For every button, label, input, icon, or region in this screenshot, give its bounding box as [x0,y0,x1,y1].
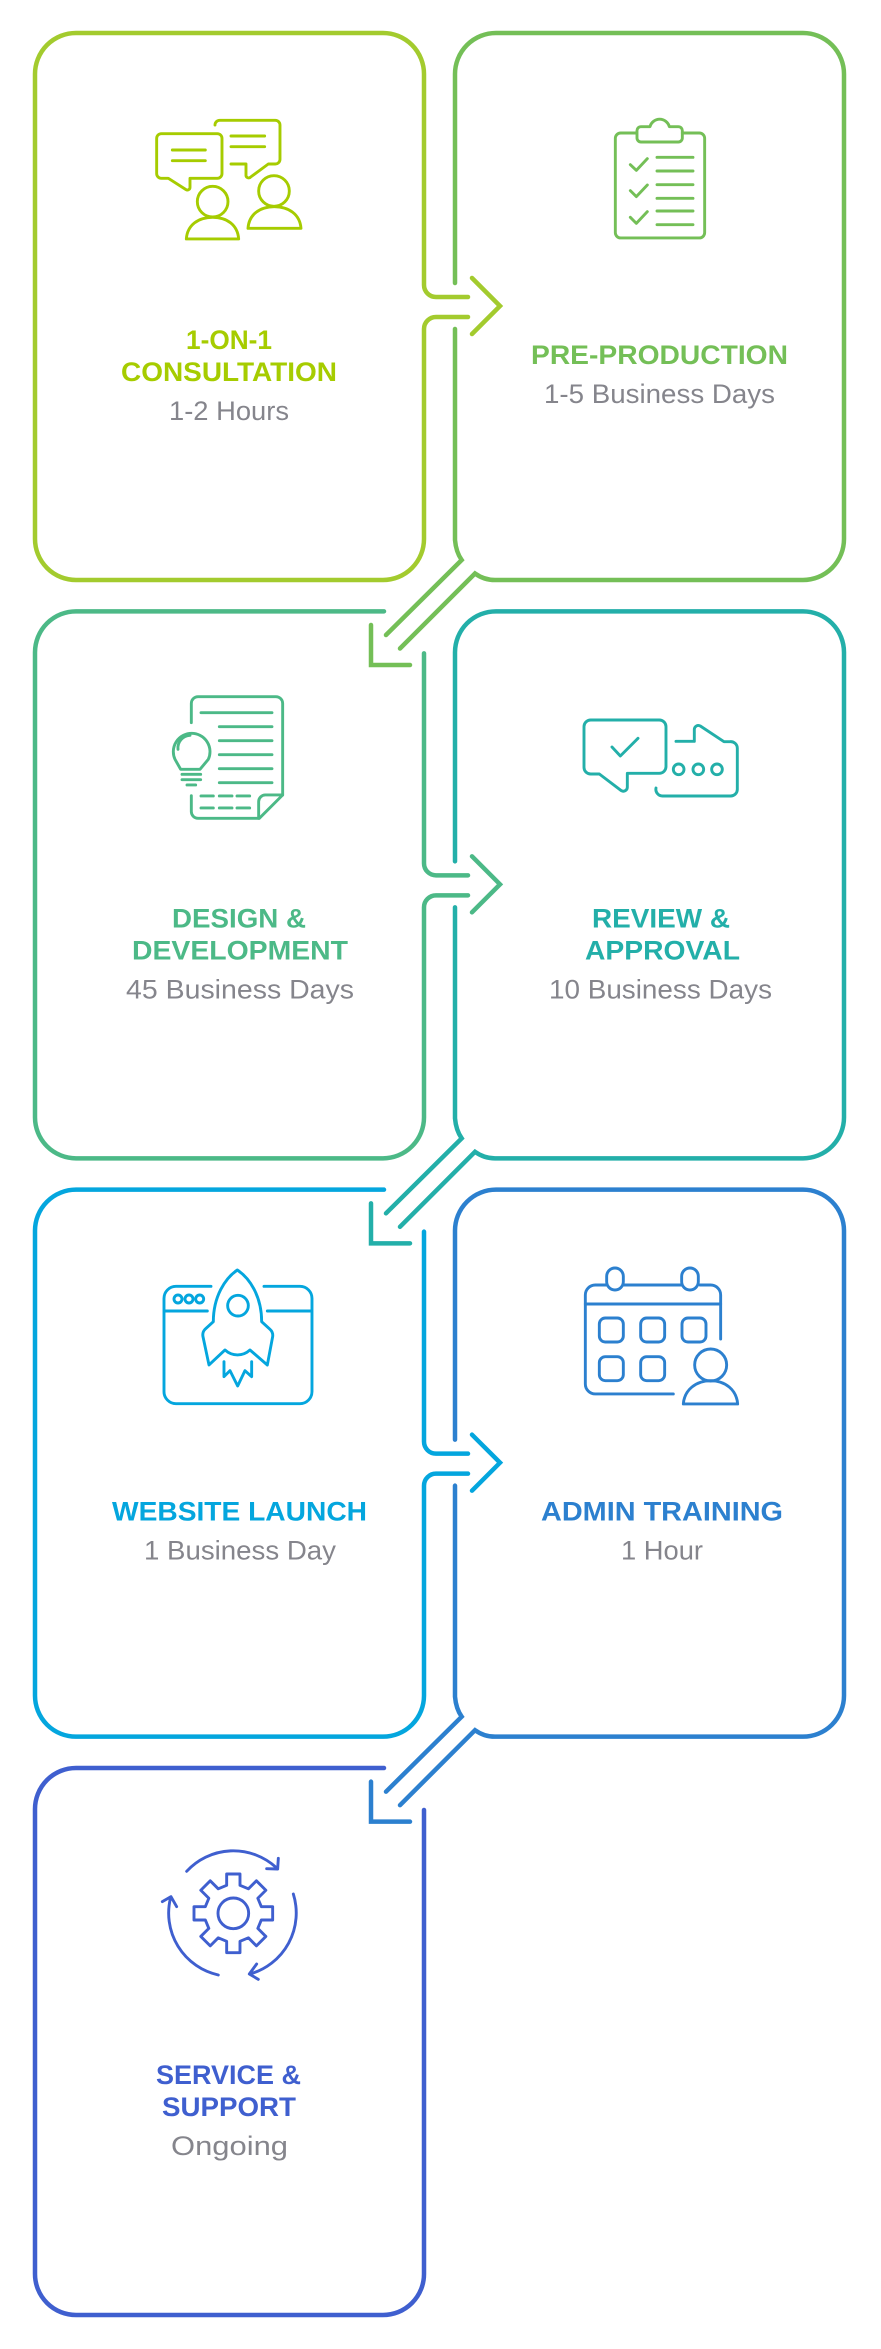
icon: two people talking [157,120,301,239]
icon: document with lightbulb [173,697,283,818]
icon: gear with circular arrows [162,1851,296,1979]
card outline [35,611,468,1158]
heading: SERVICE & [156,2060,301,2090]
duration: 1-2 Hours [169,396,289,426]
duration: 45 Business Days [126,974,354,1004]
arrow to design and development [371,625,410,665]
arrow to website launch [371,1203,410,1243]
panel: pre-production [371,33,844,665]
panel: website launch [35,1190,500,1737]
duration: 10 Business Days [549,974,772,1004]
card outline with connector [386,33,844,648]
duration: 1-5 Business Days [544,379,775,409]
duration: Ongoing [171,2131,288,2161]
heading: DEVELOPMENT [132,935,348,965]
heading: PRE-PRODUCTION [531,340,788,370]
panel: review and approval [371,611,844,1243]
card outline [35,33,468,580]
heading: SUPPORT [162,2092,296,2122]
arrow to review and approval [472,856,500,912]
panel: 1-on-1 consultation [35,33,500,580]
heading: DESIGN & [172,903,306,933]
heading: APPROVAL [585,935,740,965]
arrow to service and support [371,1782,410,1822]
icon: speech bubbles with check [584,720,737,796]
card outline with connector [386,611,844,1227]
panel: service and support [35,1768,424,2315]
panel: admin training [371,1190,844,1822]
heading: REVIEW & [592,903,730,933]
arrow to admin training [472,1435,500,1491]
heading: ADMIN TRAINING [541,1497,783,1527]
icon: clipboard checklist [615,119,705,238]
icon: rocket launching from browser window [164,1270,312,1404]
card outline [35,1190,468,1737]
card outline [35,1768,424,2315]
card outline with connector [386,1190,844,1805]
icon: calendar with person [585,1268,738,1404]
arrow to pre-production [472,278,500,334]
duration: 1 Hour [621,1536,703,1566]
duration: 1 Business Day [144,1536,337,1566]
heading: CONSULTATION [121,357,337,387]
panel: design and development [35,611,500,1158]
heading: WEBSITE LAUNCH [112,1497,367,1527]
heading: 1-ON-1 [186,325,272,355]
